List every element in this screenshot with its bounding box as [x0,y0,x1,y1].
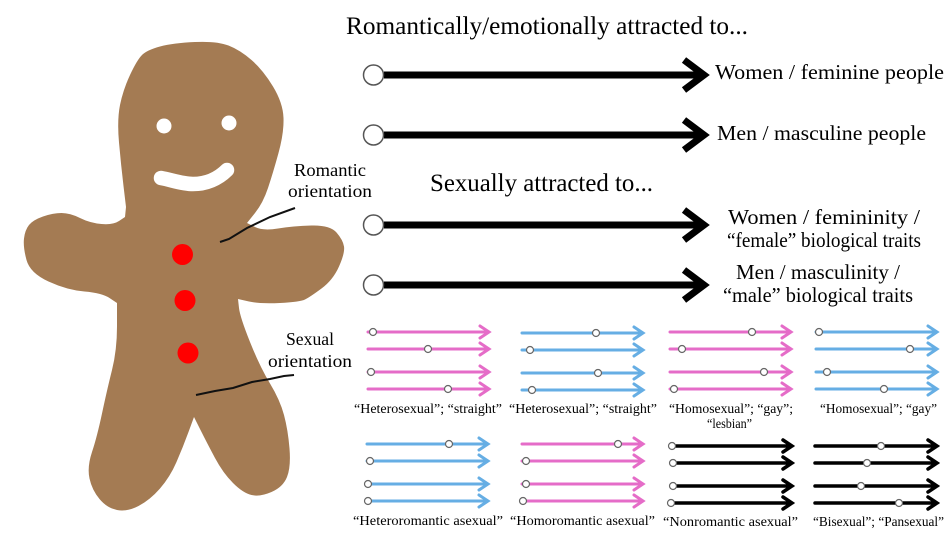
caption: bisexual, pansexual: “Bisexual”; “Pansexual” [813,514,944,529]
smile [161,170,227,184]
caption: heterosexual: “Heterosexual”; “straight” [354,401,502,416]
pointer line: sexual orientation [196,375,294,395]
caption: homosexual, gay, lesbian: “Homosexual”; “gay”; [669,401,793,416]
mini chart: bisexual, pansexual [815,440,937,509]
label: sexual orientation [268,329,352,371]
large arrow: women, sexual [364,210,704,240]
mini chart: homosexual, blue [816,326,937,395]
caption: homoromantic asexual: “Homoromantic asexual” [510,513,655,528]
label: sexual orientation: Sexual [286,329,334,349]
body silhouette [24,42,344,511]
mini chart: homosexual, pink [670,326,791,395]
top button [172,244,193,265]
label: sexual orientation: orientation [268,351,352,371]
label: romantic orientation: orientation [288,181,372,201]
caption: nonromantic asexual: “Nonromantic asexual” [663,514,798,529]
middle button [174,290,196,311]
large arrow: men, romantic [364,120,704,150]
right eye [222,116,236,130]
arrow label: men / masculinity [723,260,913,307]
arrow label: men / masculine people: Men / masculine people [717,121,926,145]
mini chart: nonromantic asexual [668,440,792,509]
caption: heterosexual, second: “Heterosexual”; “straight” [509,401,657,416]
pointer line: romantic orientation [220,208,295,242]
label: romantic orientation: Romantic [294,160,366,180]
arrow label: men / masculinity: Men / masculinity / [736,260,900,284]
heading: sexual attraction: Sexually attracted to... [430,170,653,197]
large arrow: men, sexual [364,270,704,300]
arrow label: women / femininity: “female” biological traits [727,228,921,252]
caption: homosexual, gay, lesbian [669,401,793,431]
caption: homosexual, gay: “Homosexual”; “gay” [820,401,937,416]
arrow label: women / feminine people: Women / feminine people [715,60,944,84]
caption: heteroromantic asexual: “Heteroromantic asexual” [353,513,503,528]
mini chart: heterosexual, blue [522,327,643,396]
bottom button [178,342,198,364]
mini chart: homoromantic asexual [520,438,643,507]
large arrow: women, romantic [364,60,704,90]
heading: romantic attraction: Romantically/emotionally attracted to... [346,13,748,40]
arrow label: women / femininity [727,205,921,252]
caption: homosexual, gay, lesbian: “lesbian” [707,416,752,431]
mini chart: heteroromantic asexual [364,438,488,507]
label: romantic orientation [288,160,372,201]
left eye [156,118,172,134]
mini chart: heterosexual, pink [368,326,489,395]
gingerbread figure [24,42,344,511]
arrow label: men / masculinity: “male” biological traits [723,283,913,307]
arrow label: women / femininity: Women / femininity / [728,205,920,229]
